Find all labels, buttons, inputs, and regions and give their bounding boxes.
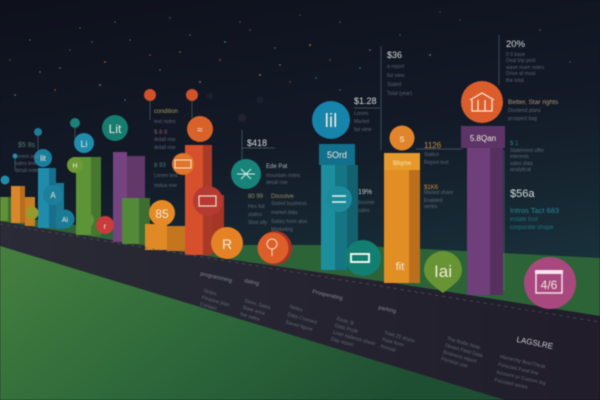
label: table notes: Hes fail: [248, 204, 265, 210]
label: 20%: [506, 39, 545, 84]
label: $56: Intros Tact 683: [510, 206, 559, 215]
caption: notes five: Rate form: [381, 337, 404, 349]
label: teal notes: $ 1: [510, 141, 519, 147]
label: 20%: 20%: [506, 39, 526, 50]
label: left column: $5 8s: [18, 142, 36, 149]
label: purple group: status row: [154, 183, 177, 189]
label: 20%: Deal trip post: [506, 58, 536, 64]
label: right heading: prospect bag: [508, 116, 537, 122]
label: left column: sales text: [15, 161, 37, 167]
label: 19%: Income: [358, 200, 375, 206]
label: right heading: Better, Star rights: [508, 99, 559, 106]
icon: orange base circle: [211, 227, 243, 259]
icon: magenta circle: 4/6: [541, 278, 558, 292]
back green hill: [0, 215, 600, 320]
caption: prosperity: Prosperating: [312, 289, 343, 302]
caption: notes six: Pension use: [440, 356, 469, 370]
bar: small green: [0, 197, 11, 222]
icon: blue circle two: Li: [80, 139, 88, 149]
icon: olive circle: [26, 206, 38, 220]
bar: purple: [113, 152, 145, 242]
label: $36: list view: [387, 73, 405, 79]
label: $418: $418: [247, 138, 267, 148]
caption: notes one: [199, 288, 232, 315]
label: purple group: $ 8 8: [154, 130, 168, 136]
connector lines: [15, 35, 504, 290]
label: $36: a report: [387, 64, 405, 70]
caption: notes six: Desert Field Data: [444, 343, 483, 359]
icon: teal circle: [102, 115, 128, 141]
icon: blue circle two: [74, 133, 94, 153]
road dashed line: [0, 224, 600, 322]
caption: notes one: Contact: [199, 302, 218, 312]
caption: notes five: Total 25 share: [383, 330, 415, 344]
caption: notes five: Annual: [379, 343, 396, 354]
label: purple group: detail row: [154, 145, 176, 151]
caption: notes five: [379, 330, 415, 358]
label: teal notes: analytical: [510, 167, 531, 173]
bar: blue: [38, 168, 64, 229]
label: $56: corporate shape: [510, 225, 554, 231]
label: $418: mountain notes: [266, 173, 301, 179]
bar: green: [76, 157, 101, 236]
label: $1K: series: [424, 204, 438, 210]
bar: orange: [384, 153, 420, 283]
caption: notes three: Saved figure: [284, 319, 313, 333]
label: 20%: Drive at most: [506, 71, 536, 77]
label: table notes: Shot ally: [248, 220, 268, 226]
icon: blue pin left: [0, 176, 10, 184]
icon: red base circle: r: [104, 222, 107, 231]
icon: blue lower circle: [43, 185, 63, 205]
label: table notes: statics: [248, 212, 263, 218]
label: 1126: [424, 141, 449, 166]
icon: green circle: H: [72, 163, 78, 170]
caption: notes three: Data Connect: [287, 312, 318, 326]
label: purple group: Lorem text: [154, 173, 178, 179]
icon: teal mid circle: [326, 186, 352, 212]
icon: green circle: [67, 157, 83, 173]
caption: notes two: fee sales: [239, 311, 261, 323]
icon: teal base circle: [345, 240, 381, 276]
label: $1K: Market share: [424, 190, 453, 196]
icon: orange circle top: [187, 116, 213, 142]
caption: parking: parking: [378, 305, 397, 315]
label: $1.28: Market: [354, 119, 370, 125]
caption: dating: dating: [244, 278, 260, 287]
caption: notes one: Notes: [203, 288, 218, 298]
caption: notes seven: Focused series: [494, 377, 529, 391]
caption: notes six: The Rollin Note: [446, 336, 481, 351]
caption: notes one: Finance plan: [201, 295, 230, 309]
label: right heading: Dividend plans: [508, 108, 541, 114]
icon: orange pin top: [390, 126, 414, 150]
caption: notes seven: Account or Custom log: [496, 370, 546, 387]
label: $418: detail row: [266, 180, 288, 186]
label: $56: estate tool: [510, 217, 538, 223]
bar: orange: $8qme: [393, 161, 412, 167]
bar: low orange: [145, 224, 185, 251]
labels above: [15, 39, 559, 233]
label: purple group: text notes: [154, 119, 176, 125]
label: table notes: 80 99: [248, 194, 264, 200]
icon: blue circle: [34, 149, 52, 167]
caption: notes two: Store, Sales: [243, 298, 272, 311]
caption: notes two: State area: [241, 305, 265, 317]
label: table notes: Dissolve: [271, 194, 294, 200]
label: table notes: Marketing: [271, 227, 293, 233]
icon: orange banner circle: [172, 153, 194, 175]
label: 1126: Report text: [424, 160, 449, 166]
icon: red base circle: [96, 216, 114, 234]
label: purple group: 8 93: [154, 163, 166, 169]
label: 19%: sales: [358, 208, 370, 214]
icon: orange pin top: s: [400, 134, 404, 145]
icon: blue lower circle: A: [50, 191, 56, 200]
label: table notes: [248, 194, 307, 233]
label: $1.28: $1.28: [354, 96, 377, 106]
caption: notes four: Day report: [330, 336, 355, 349]
bars: [0, 126, 505, 295]
label: $36: Total (year): [387, 91, 412, 97]
caption: notes six: Business report: [442, 349, 478, 365]
label: left column: Lorem and: [15, 154, 39, 160]
caption: notes four: Ease, B: [336, 316, 355, 327]
icon: blue base circle: [56, 210, 74, 228]
label: $1.28: Lorem: [354, 111, 368, 117]
caption: notes seven: Forecast Fund line: [497, 362, 539, 377]
label: 19%: 19%: [358, 189, 372, 196]
caption: notes six: [440, 336, 485, 373]
road captions: [199, 271, 554, 395]
caption: landslide heading: LAGSLRE: [516, 335, 554, 351]
icon: green pin: [424, 251, 462, 293]
caption: notes seven: [494, 354, 550, 395]
label: 19%: [358, 189, 375, 214]
icon: green pin: Iai: [434, 262, 452, 281]
label: $1.28: [354, 96, 377, 133]
circle icons: [0, 81, 576, 309]
icon: lightbulb circle: [258, 231, 292, 265]
label: $418: [247, 138, 301, 186]
label: left column: [15, 142, 39, 174]
icon: red banner circle: [193, 186, 223, 216]
icon: teal circle: Lit: [109, 122, 122, 136]
label: $1K: [424, 185, 453, 210]
label: 20%: the total: [506, 78, 524, 84]
caption: notes three: Notes: [289, 304, 304, 314]
icon: orange red house circle: [461, 81, 503, 123]
bar: small orange: [11, 186, 35, 226]
label: $1.28: list view: [354, 127, 372, 133]
bar: red: [185, 145, 224, 255]
label: 20%: wave more notes: [506, 65, 545, 71]
caption: notes four: Data Profit: [334, 323, 359, 335]
label: purple group: condition: [154, 109, 178, 115]
label: teal notes: Statement offer: [510, 148, 544, 154]
bar: purple tall: [461, 126, 505, 295]
label: teal notes: sales data: [510, 161, 533, 167]
icon: blue dot: [34, 128, 42, 136]
icon: orange number circle: 85: [155, 207, 169, 221]
bar: teal cap: [319, 144, 355, 165]
label: 1126: Statics: [424, 152, 440, 158]
icon: road pin orange: fit: [396, 261, 404, 273]
label: table notes: Stated business: [271, 201, 307, 207]
icon: blue circle: lit: [40, 154, 47, 163]
icon: teal dot: [70, 118, 80, 128]
label: 1126: 1126: [424, 141, 442, 150]
bar: purple tall: 5.8Qan: [470, 134, 496, 143]
label: $36: $36: [387, 50, 402, 60]
icon: magenta circle: [524, 257, 576, 309]
dark road band: [0, 221, 600, 400]
icon: orange circle top: ≈: [197, 125, 203, 136]
label: teal notes: [510, 141, 544, 173]
label: table notes: market data: [271, 210, 298, 216]
label: table notes: Salary form also: [271, 219, 307, 225]
bar: green step: [122, 198, 150, 244]
label: left column: detail note: [15, 168, 38, 174]
icon: green base circle: [78, 212, 94, 228]
caption: program: programming: [200, 271, 232, 284]
label: $56: $56a: [510, 188, 535, 200]
caption: notes four: Loan balance sheet: [332, 330, 376, 348]
icon: red dot left: [144, 89, 156, 101]
caption: notes four: [330, 316, 380, 354]
label: $1K: Enabled: [424, 198, 443, 204]
icon: blue large circle: [312, 101, 350, 139]
bar: teal cap: 5Ord: [327, 150, 347, 160]
caption: notes seven: Hierarchy BostTheak: [499, 354, 547, 370]
icon: orange base circle: R: [222, 236, 232, 252]
label: $418: Ede Pat: [266, 164, 288, 170]
label: teal notes: interests: [510, 154, 529, 160]
label: right heading: [508, 99, 559, 122]
icon: blue large circle: lil: [325, 111, 337, 132]
label: 20%: 0 0 base: [506, 52, 525, 58]
caption: notes two: [239, 298, 272, 325]
caption: notes three: [284, 304, 321, 334]
label: $36: Stated: [387, 82, 402, 88]
label: $1K: $1K6: [424, 185, 439, 191]
label: purple group: [154, 109, 178, 189]
icon: red dot right: [186, 89, 198, 101]
foreground green field: [0, 240, 510, 400]
label: purple group: detail row: [154, 137, 176, 143]
icon: teal large circle: [231, 159, 261, 189]
icon: small blue dot: [12, 154, 18, 158]
label: $36: [387, 50, 412, 97]
icon: blue base circle: Ai: [62, 217, 69, 224]
icon: orange number circle: [149, 200, 175, 226]
starfield: [9, 12, 571, 122]
label: $56: [510, 188, 559, 231]
bar: teal: [321, 165, 358, 270]
